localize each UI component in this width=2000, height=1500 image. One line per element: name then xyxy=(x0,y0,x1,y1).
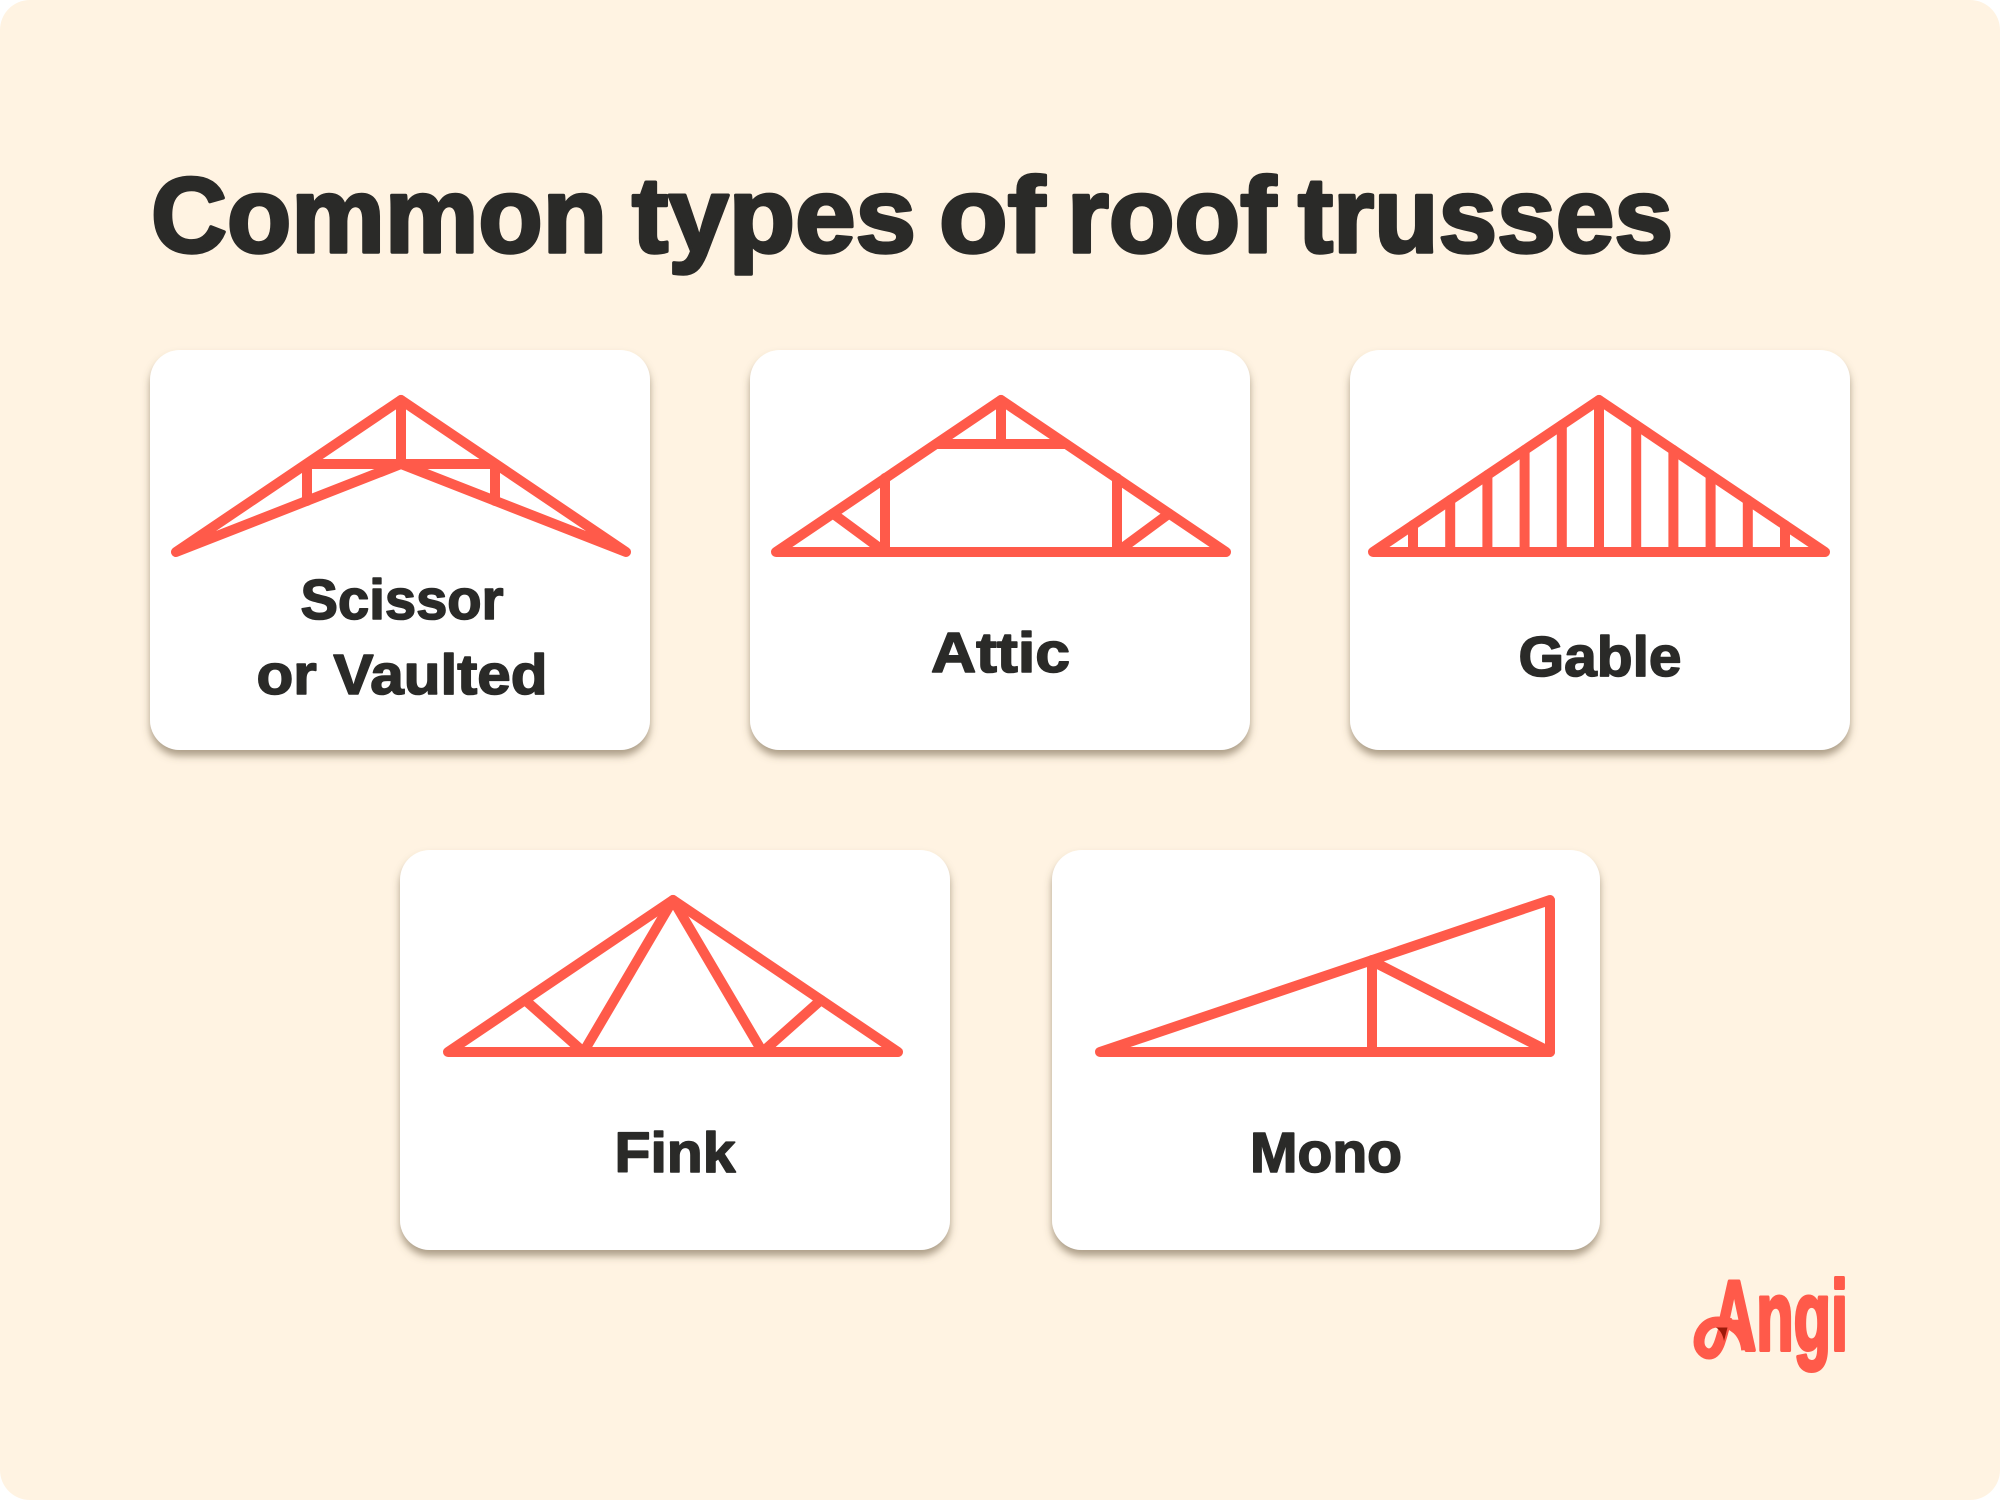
logo: Angi: Angi xyxy=(1712,1260,1848,1371)
title: roof xyxy=(1067,155,1276,275)
icon: mono truss xyxy=(1100,900,1550,1052)
label: Scissor or Vaulted xyxy=(256,568,548,707)
panel: mono truss xyxy=(1052,850,1600,1250)
title: Common xyxy=(151,155,607,275)
title: types xyxy=(632,155,916,275)
label: Attic: Attic xyxy=(931,621,1070,685)
panel: gable truss xyxy=(1350,350,1850,750)
label: Gable: Gable xyxy=(1518,625,1682,689)
panel: scissor or vaulted truss xyxy=(150,350,650,750)
label: Scissor or Vaulted: or Vaulted xyxy=(256,643,548,707)
title: trusses xyxy=(1298,155,1673,275)
panel: fink truss xyxy=(400,850,950,1250)
title: of xyxy=(939,155,1045,275)
panel: attic truss xyxy=(750,350,1250,750)
label: Fink: Fink xyxy=(614,1121,736,1185)
icon: scissor truss xyxy=(176,400,626,552)
label: Mono: Mono xyxy=(1250,1121,1402,1185)
logo: Angi xyxy=(1699,1260,1848,1371)
label: Scissor or Vaulted: Scissor xyxy=(300,568,504,632)
icon: fink truss xyxy=(448,900,898,1052)
icon: gable truss xyxy=(1373,400,1825,552)
title xyxy=(151,155,1673,275)
icon: attic truss xyxy=(776,400,1226,552)
